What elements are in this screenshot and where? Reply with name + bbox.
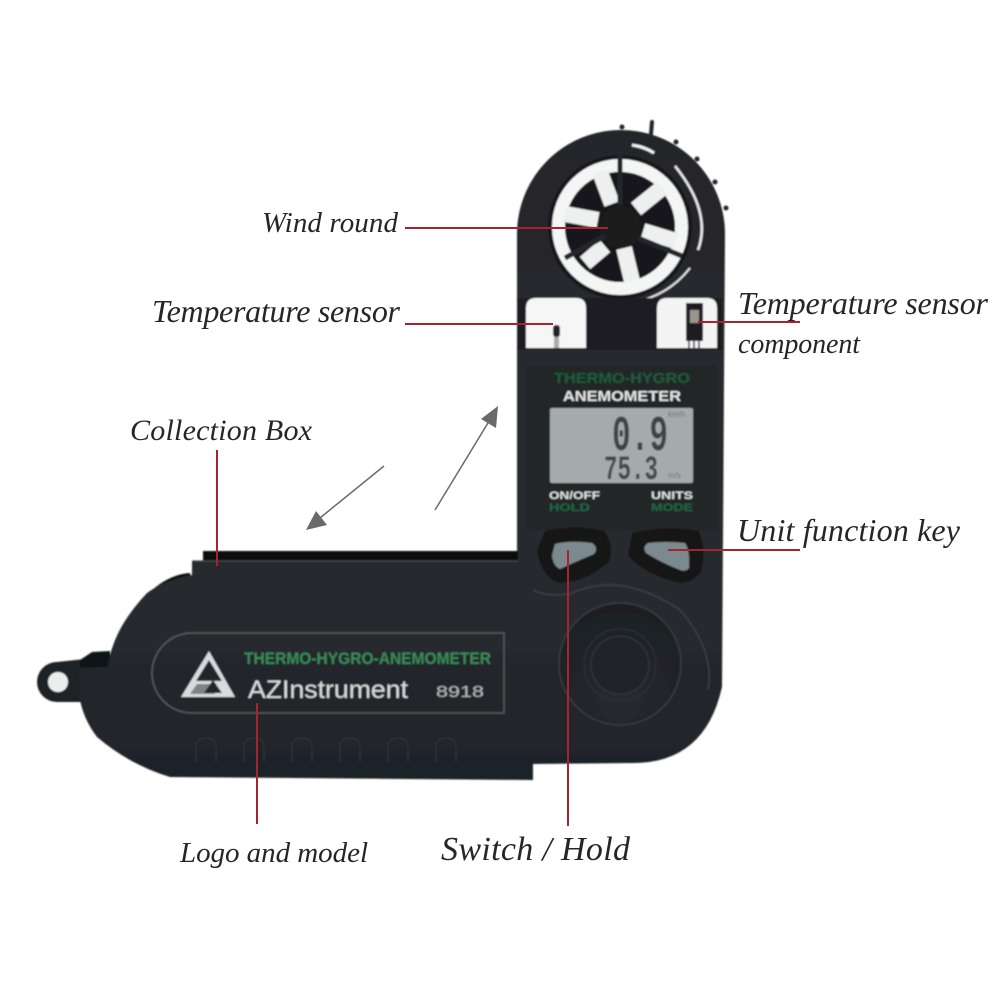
logo panel bbox=[152, 633, 504, 713]
button labels: UNITS bbox=[651, 490, 693, 502]
fan: wind round bbox=[548, 145, 702, 304]
arrow: fold down-left bbox=[306, 466, 384, 530]
button labels: MODE bbox=[651, 502, 693, 514]
LCD screen bbox=[550, 408, 693, 490]
sensor windows bbox=[518, 298, 722, 350]
callout: collection box: Collection Box bbox=[130, 414, 313, 447]
brand name: AZInstrument bbox=[248, 676, 408, 704]
heading: anemometer: ANEMOMETER bbox=[563, 389, 682, 405]
LCD screen: m/s bbox=[668, 471, 681, 480]
button labels bbox=[549, 490, 693, 514]
display panel bbox=[527, 365, 717, 530]
button labels: HOLD bbox=[549, 502, 590, 514]
buttons bbox=[537, 528, 704, 583]
device: anemometer bbox=[37, 122, 728, 780]
callout: switch / hold: Switch / Hold bbox=[441, 831, 631, 868]
model heading: THERMO-HYGRO-ANEMOMETER bbox=[244, 649, 491, 668]
LCD screen: 75.3 bbox=[604, 452, 658, 490]
callout: unit function key: Unit function key bbox=[737, 512, 961, 548]
LCD screen: km/h bbox=[668, 410, 685, 419]
callout: wind round: Wind round bbox=[262, 207, 398, 239]
callout: temperature sensor component: component bbox=[738, 329, 861, 360]
collection box lid bbox=[37, 551, 533, 780]
callout: temperature sensor: Temperature sensor bbox=[152, 293, 401, 329]
callout: temperature sensor component: Temperature sensor bbox=[738, 285, 989, 321]
heading: thermo-hygro: THERMO-HYGRO bbox=[554, 371, 690, 387]
button labels: ON/OFF bbox=[549, 490, 600, 502]
callout: temperature sensor component bbox=[698, 285, 989, 360]
icon: AZ logo bbox=[181, 651, 235, 697]
model number: 8918 bbox=[436, 684, 484, 701]
LCD screen: 0.9 bbox=[612, 409, 668, 466]
arrow: fold up-right bbox=[435, 406, 498, 510]
callout: logo and model: Logo and model bbox=[179, 837, 368, 869]
thumb wheel bbox=[533, 585, 709, 725]
vertical body with fan head bbox=[500, 122, 728, 764]
